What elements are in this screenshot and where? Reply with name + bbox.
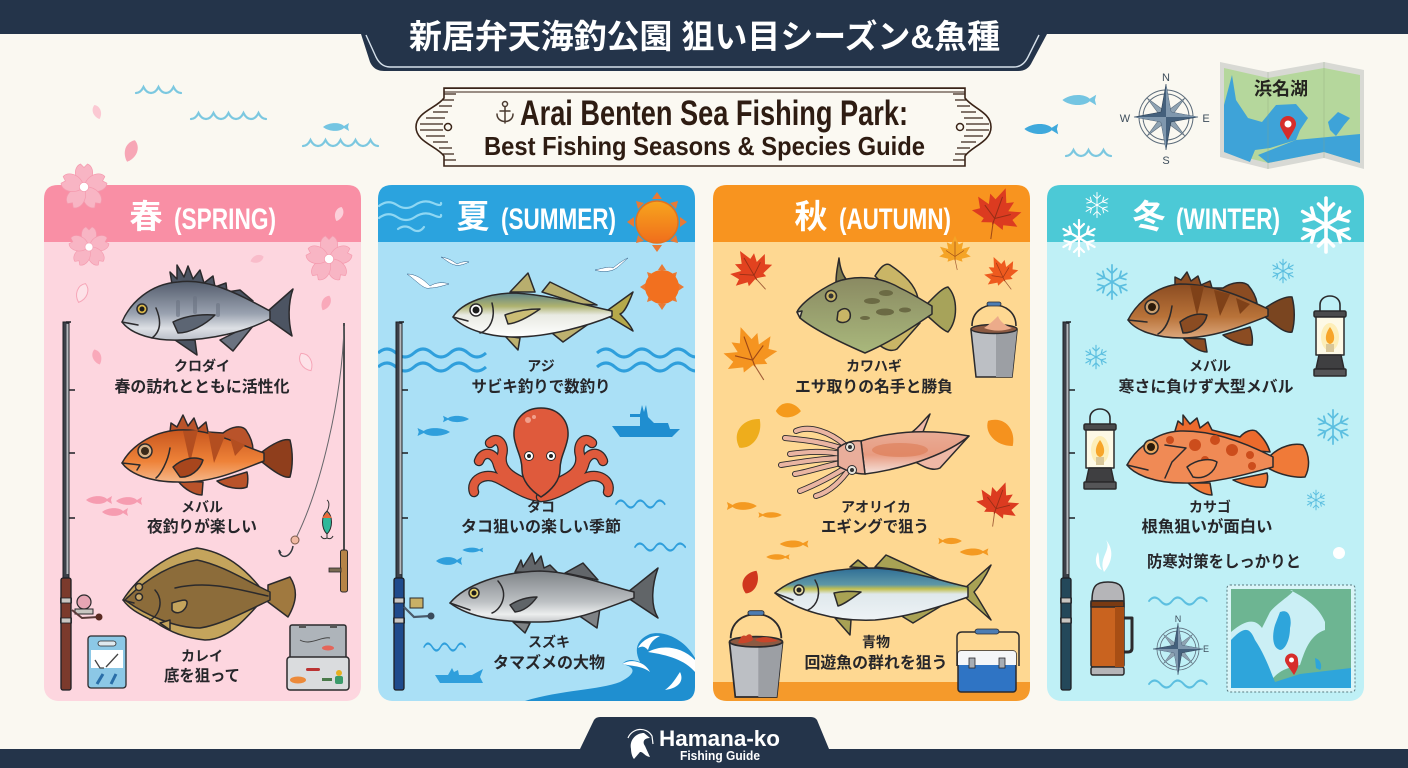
brand text: Fishing Guide xyxy=(680,748,760,763)
big ocean wave xyxy=(525,633,695,701)
label: aoriika xyxy=(821,499,929,536)
steam xyxy=(1096,540,1111,572)
sun small xyxy=(640,264,684,310)
spring header band xyxy=(44,185,361,242)
autumn heading: 秋 xyxy=(794,198,828,235)
lantern left xyxy=(1084,409,1116,489)
label: kasago: 根魚狙いが面白い xyxy=(1142,517,1272,536)
mid waves and fish xyxy=(436,500,685,565)
fish: horse mackerel xyxy=(453,273,633,350)
spring heading: (SPRING) xyxy=(174,203,276,236)
label: winter mebaru: メバル xyxy=(1189,358,1231,374)
brand text: Hamana-ko xyxy=(659,726,780,751)
small wave and boat xyxy=(424,644,483,683)
sun large xyxy=(627,192,687,252)
small blue fish xyxy=(418,416,469,436)
label: aomono: 回遊魚の群れを狙う xyxy=(804,653,948,672)
label: suzuki xyxy=(493,634,605,672)
small pink fish xyxy=(86,496,142,516)
fish: sea bass xyxy=(450,553,658,633)
summer heading: (SUMMER) xyxy=(501,203,616,236)
panel: winter xyxy=(1047,185,1364,701)
label: suzuki: タマズメの大物 xyxy=(493,653,605,672)
label: kasago: カサゴ xyxy=(1189,499,1231,515)
fishing rod left xyxy=(60,322,102,690)
label: aji: サビキ釣りで数釣り xyxy=(472,377,610,396)
white snowflakes xyxy=(1061,192,1353,256)
label: mebaru: メバル xyxy=(181,499,223,515)
autumn panel background xyxy=(713,185,1030,701)
hook pack xyxy=(88,636,126,688)
label: karei: カレイ xyxy=(181,648,223,664)
winter heading: 冬 xyxy=(1132,198,1166,235)
waves around mini compass xyxy=(1149,598,1207,688)
label: aomono: 青物 xyxy=(862,634,890,650)
label: mebaru: 夜釣りが楽しい xyxy=(147,517,257,536)
compass rose: N xyxy=(1162,72,1170,84)
fish: flounder xyxy=(123,548,295,640)
english title plaque: Arai Benten Sea Fishing Park: xyxy=(520,94,908,133)
fish: yellowtail xyxy=(775,555,991,635)
spring panel background xyxy=(44,185,361,701)
compass rose: E xyxy=(1202,113,1210,125)
decorative fish and waves top right xyxy=(1024,95,1111,156)
footer band with Hamana-ko tab xyxy=(0,717,1408,768)
seagulls xyxy=(407,257,628,288)
label: tako xyxy=(461,499,621,536)
summer panel background xyxy=(378,185,695,701)
label: kurodai: クロダイ xyxy=(174,358,230,374)
falling petals xyxy=(74,206,345,373)
autumn heading: (AUTUMN) xyxy=(839,203,951,236)
label: mebaru xyxy=(147,499,257,536)
maple leaves xyxy=(716,180,1028,533)
lantern upper right xyxy=(1314,296,1346,376)
fish: black sea bream xyxy=(122,265,293,355)
float lure xyxy=(321,500,333,539)
winter heading: (WINTER) xyxy=(1176,203,1280,236)
tackle box xyxy=(287,625,349,690)
label: aji: アジ xyxy=(527,358,555,374)
cooler box xyxy=(957,629,1019,692)
label: kasago xyxy=(1142,499,1272,536)
label: aomono xyxy=(804,634,948,672)
bait bucket right xyxy=(971,302,1017,377)
fishing rod xyxy=(1060,322,1075,690)
blue snowflakes xyxy=(1084,259,1350,510)
label: aoriika: エギングで狙う xyxy=(821,517,929,536)
folded map of Hamana-ko xyxy=(1220,62,1364,169)
label: karei: 底を狙って xyxy=(164,667,240,685)
mini compass: N xyxy=(1175,614,1181,624)
cherry blossoms xyxy=(59,164,354,283)
inset map xyxy=(1227,585,1355,692)
label: kurodai xyxy=(114,358,290,396)
label: kawahagi: カワハギ xyxy=(846,358,902,374)
panel: summer xyxy=(378,185,705,701)
label: winter mebaru: 寒さに負けず大型メバル xyxy=(1118,377,1294,396)
waves left and right xyxy=(378,349,705,371)
label: kawahagi: エサ取りの名手と勝負 xyxy=(795,377,953,396)
autumn footer band xyxy=(713,682,1030,701)
octopus xyxy=(473,408,609,497)
icon: anchor xyxy=(497,102,513,123)
cold protection note: 防寒対策をしっかりと xyxy=(1147,552,1301,571)
label: aoriika: アオリイカ xyxy=(841,499,911,515)
decorative waves, fish and petals top left xyxy=(91,87,378,164)
falling leaves xyxy=(730,402,1020,596)
brand text xyxy=(659,726,780,763)
summer heading xyxy=(456,198,616,236)
label: tako: タコ狙いの楽しい季節 xyxy=(461,517,621,536)
folded map of Hamana-ko: 浜名湖 xyxy=(1254,79,1308,99)
label: karei xyxy=(164,648,240,685)
ship xyxy=(612,405,680,437)
summer heading: 夏 xyxy=(456,198,490,235)
fish: mebaru rockfish xyxy=(122,415,292,495)
compass rose: S xyxy=(1162,155,1170,167)
spring heading xyxy=(130,198,276,236)
mini compass: E xyxy=(1203,644,1209,654)
header waves xyxy=(379,201,441,231)
squid xyxy=(781,414,969,496)
label: tako: タコ xyxy=(527,499,555,515)
winter panel background xyxy=(1047,185,1364,701)
compass rose: W xyxy=(1120,113,1131,125)
fishing rod right with line and hook xyxy=(279,323,348,592)
panel: spring xyxy=(44,164,361,701)
thermos xyxy=(1091,582,1132,675)
title banner xyxy=(0,0,1408,71)
winter heading xyxy=(1132,198,1280,236)
label: aji xyxy=(472,358,610,396)
winter header band xyxy=(1047,185,1364,242)
label: kurodai: 春の訪れとともに活性化 xyxy=(114,377,290,396)
label: suzuki: スズキ xyxy=(528,634,570,650)
english title plaque: Best Fishing Seasons & Species Guide xyxy=(484,131,925,161)
fishing rod xyxy=(394,322,434,690)
fish: kasago xyxy=(1127,415,1309,495)
small orange fish xyxy=(727,502,988,560)
autumn header band xyxy=(713,185,1030,242)
autumn heading xyxy=(794,198,951,236)
compass rose xyxy=(1120,72,1210,167)
snowball xyxy=(1333,547,1345,559)
bait bucket left xyxy=(730,611,782,697)
summer header band xyxy=(378,185,695,242)
logo: leaping fish xyxy=(628,729,653,759)
fish: filefish xyxy=(797,258,956,353)
label: kawahagi xyxy=(795,358,953,396)
title banner: 新居弁天海釣公園 狙い目シーズン&魚種 xyxy=(409,18,1000,55)
english title plaque xyxy=(416,88,991,166)
mini compass xyxy=(1153,614,1209,675)
fish: winter mebaru xyxy=(1128,272,1294,352)
label: winter mebaru xyxy=(1118,358,1294,396)
spring heading: 春 xyxy=(130,198,162,235)
panel: autumn xyxy=(713,180,1030,701)
